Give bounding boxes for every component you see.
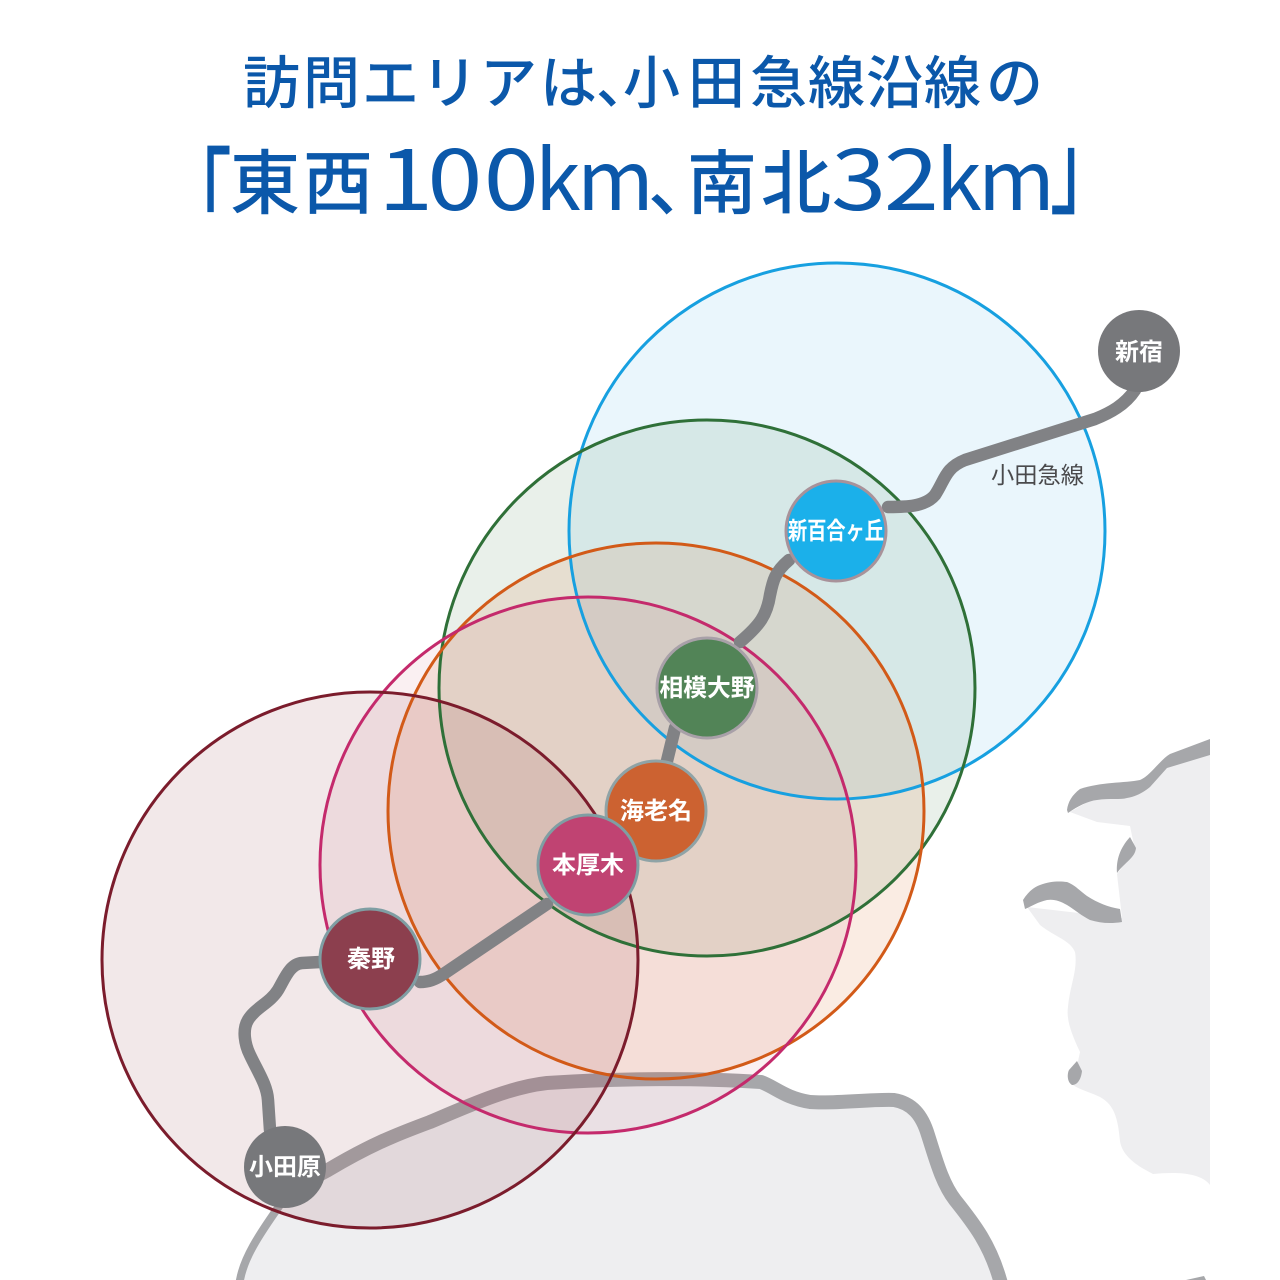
- station: Hadano: 秦野: [347, 946, 395, 973]
- title line 2: 32: [831, 115, 939, 234]
- station: Sagami-Ono: 相模大野: [660, 675, 754, 702]
- title line 2: 、: [648, 130, 718, 231]
- station: Hon-Atsugi: 本厚木: [552, 852, 624, 879]
- station: Ebina: 海老名: [620, 798, 692, 825]
- station: Sagami-Ono: [657, 638, 757, 738]
- station: Shin-Yurigaoka: 新百合ヶ丘: [788, 518, 884, 545]
- title line 2: 「: [163, 114, 232, 264]
- ring: Hadano area: [102, 692, 638, 1228]
- station: Hon-Atsugi: [538, 815, 638, 915]
- ring: Sagami-Ono area: [439, 420, 975, 956]
- Odakyu railway line: [245, 390, 1135, 1130]
- ring: Ebina area: [388, 543, 924, 1079]
- map: land left: [238, 1079, 1004, 1280]
- title line 2: km: [535, 114, 654, 234]
- line label: 小田急線: [991, 462, 1084, 488]
- station: Shinjuku: 新宿: [1115, 339, 1163, 366]
- title line 1: 訪問エリアは、小田急線沿線の: [243, 38, 1043, 120]
- circle fills: [102, 263, 1105, 1228]
- ring: Shin-Yurigaoka area: [569, 263, 1105, 799]
- ring: Hon-Atsugi area: [320, 597, 856, 1133]
- title: [163, 38, 1119, 264]
- station: Shin-Yurigaoka: [786, 481, 886, 581]
- title line 2: 」: [1050, 86, 1119, 236]
- station: Hadano: [320, 909, 420, 1009]
- station: Odawara: [244, 1126, 326, 1208]
- station: Odawara: 小田原: [249, 1154, 321, 1181]
- title line 2: 100: [378, 115, 539, 234]
- title line 2: [163, 86, 1119, 264]
- map: land right: [1023, 739, 1210, 1280]
- station: Ebina: [606, 761, 706, 861]
- title line 2: km: [936, 114, 1055, 234]
- title line 2: 東西: [230, 128, 373, 229]
- title line 2: 南北: [687, 128, 831, 229]
- station: Shinjuku: [1098, 310, 1180, 392]
